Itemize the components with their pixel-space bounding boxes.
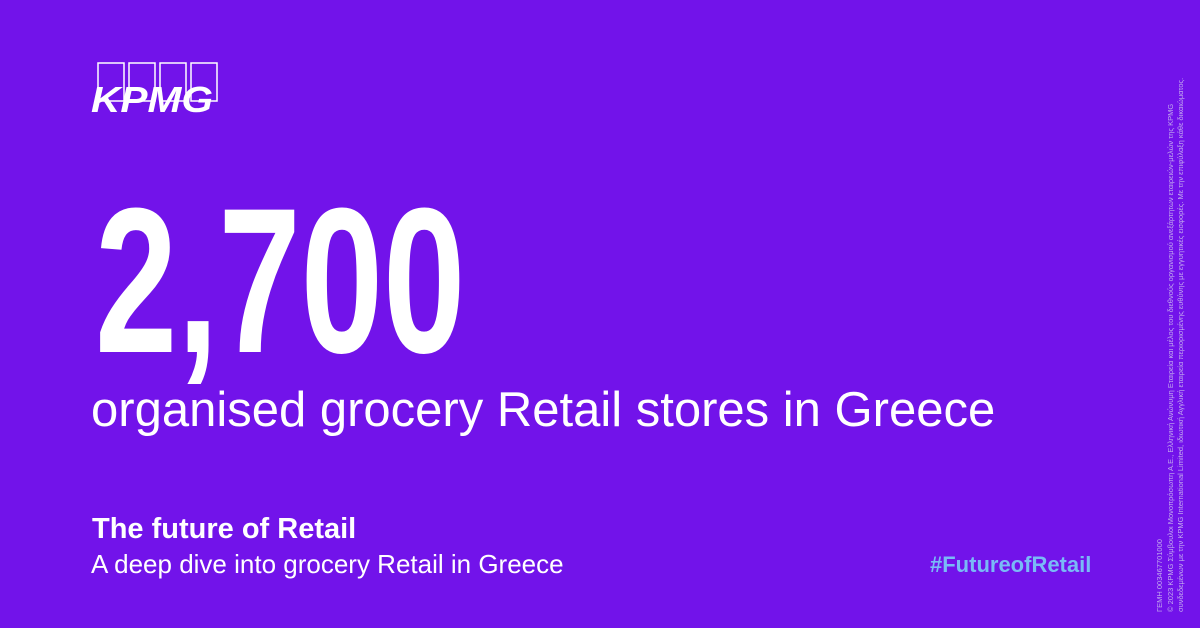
legal vertical text: ΓΕΜΗ 003467701000 — [1155, 539, 1164, 612]
text: deep dive: A deep dive into grocery Retail in Greece — [91, 549, 564, 579]
legal vertical text: συνδεδεμένων με την KPMG International Limited, ιδιωτική Αγγλική εταιρεία περιορισμένης ευθύνης με εγγυητικές εισφορές. Με την επιφύλαξη κάθε δικαιώματος. — [1176, 78, 1185, 612]
legal vertical text: © 2023 KPMG Σύμβουλοι Μονοπρόσωπη Α.Ε., Ελληνική Ανώνυμη Εταιρεία και μέλος του διεθνούς οργανισμού ανεξάρτητων εταιρειών-μελών της KPMG — [1166, 104, 1174, 612]
heading: The future of Retail: The future of Retail — [92, 513, 356, 545]
hashtag: #FutureofRetail — [930, 552, 1091, 577]
legal vertical text — [1155, 78, 1185, 612]
logo: KPMG — [91, 62, 218, 116]
big number: 2,700 — [95, 165, 465, 396]
subtitle: organised grocery Retail stores in Greece — [91, 383, 995, 437]
